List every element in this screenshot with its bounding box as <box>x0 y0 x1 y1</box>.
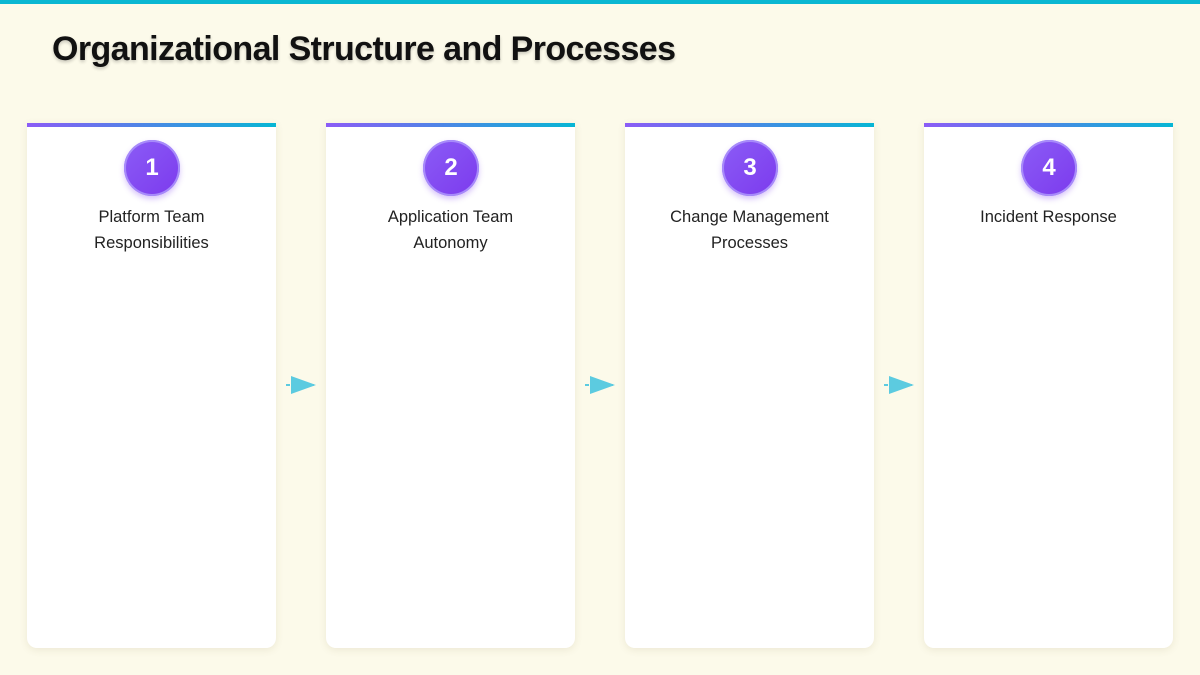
title: Organizational Structure and Processes <box>52 30 675 68</box>
icon: number 1 <box>124 140 180 196</box>
icon: number 1: 1 <box>145 154 159 181</box>
icon: number 2: 2 <box>444 154 458 181</box>
arrow 3 <box>884 376 914 394</box>
label: application: Autonomy <box>413 234 488 252</box>
label: incident: Incident Response <box>980 208 1117 226</box>
panel: change management <box>625 123 874 648</box>
label: change: Change Management <box>670 208 829 226</box>
icon: number 4 <box>1021 140 1077 196</box>
icon: number 3 <box>722 140 778 196</box>
label: platform: Platform Team <box>98 208 205 226</box>
label: platform: Responsibilities <box>94 234 209 252</box>
panel: incident response <box>924 123 1173 648</box>
panel: platform team <box>27 123 276 648</box>
label: change: Processes <box>711 234 788 252</box>
icon: number 3: 3 <box>743 154 757 181</box>
label: application: Application Team <box>388 208 513 226</box>
label: application <box>388 208 513 252</box>
icon: number 2 <box>423 140 479 196</box>
label: platform <box>94 208 209 252</box>
label: change <box>670 208 829 252</box>
arrow 1 <box>286 376 316 394</box>
icon: number 4: 4 <box>1042 154 1056 181</box>
arrow 2 <box>585 376 615 394</box>
panel: application team <box>326 123 575 648</box>
